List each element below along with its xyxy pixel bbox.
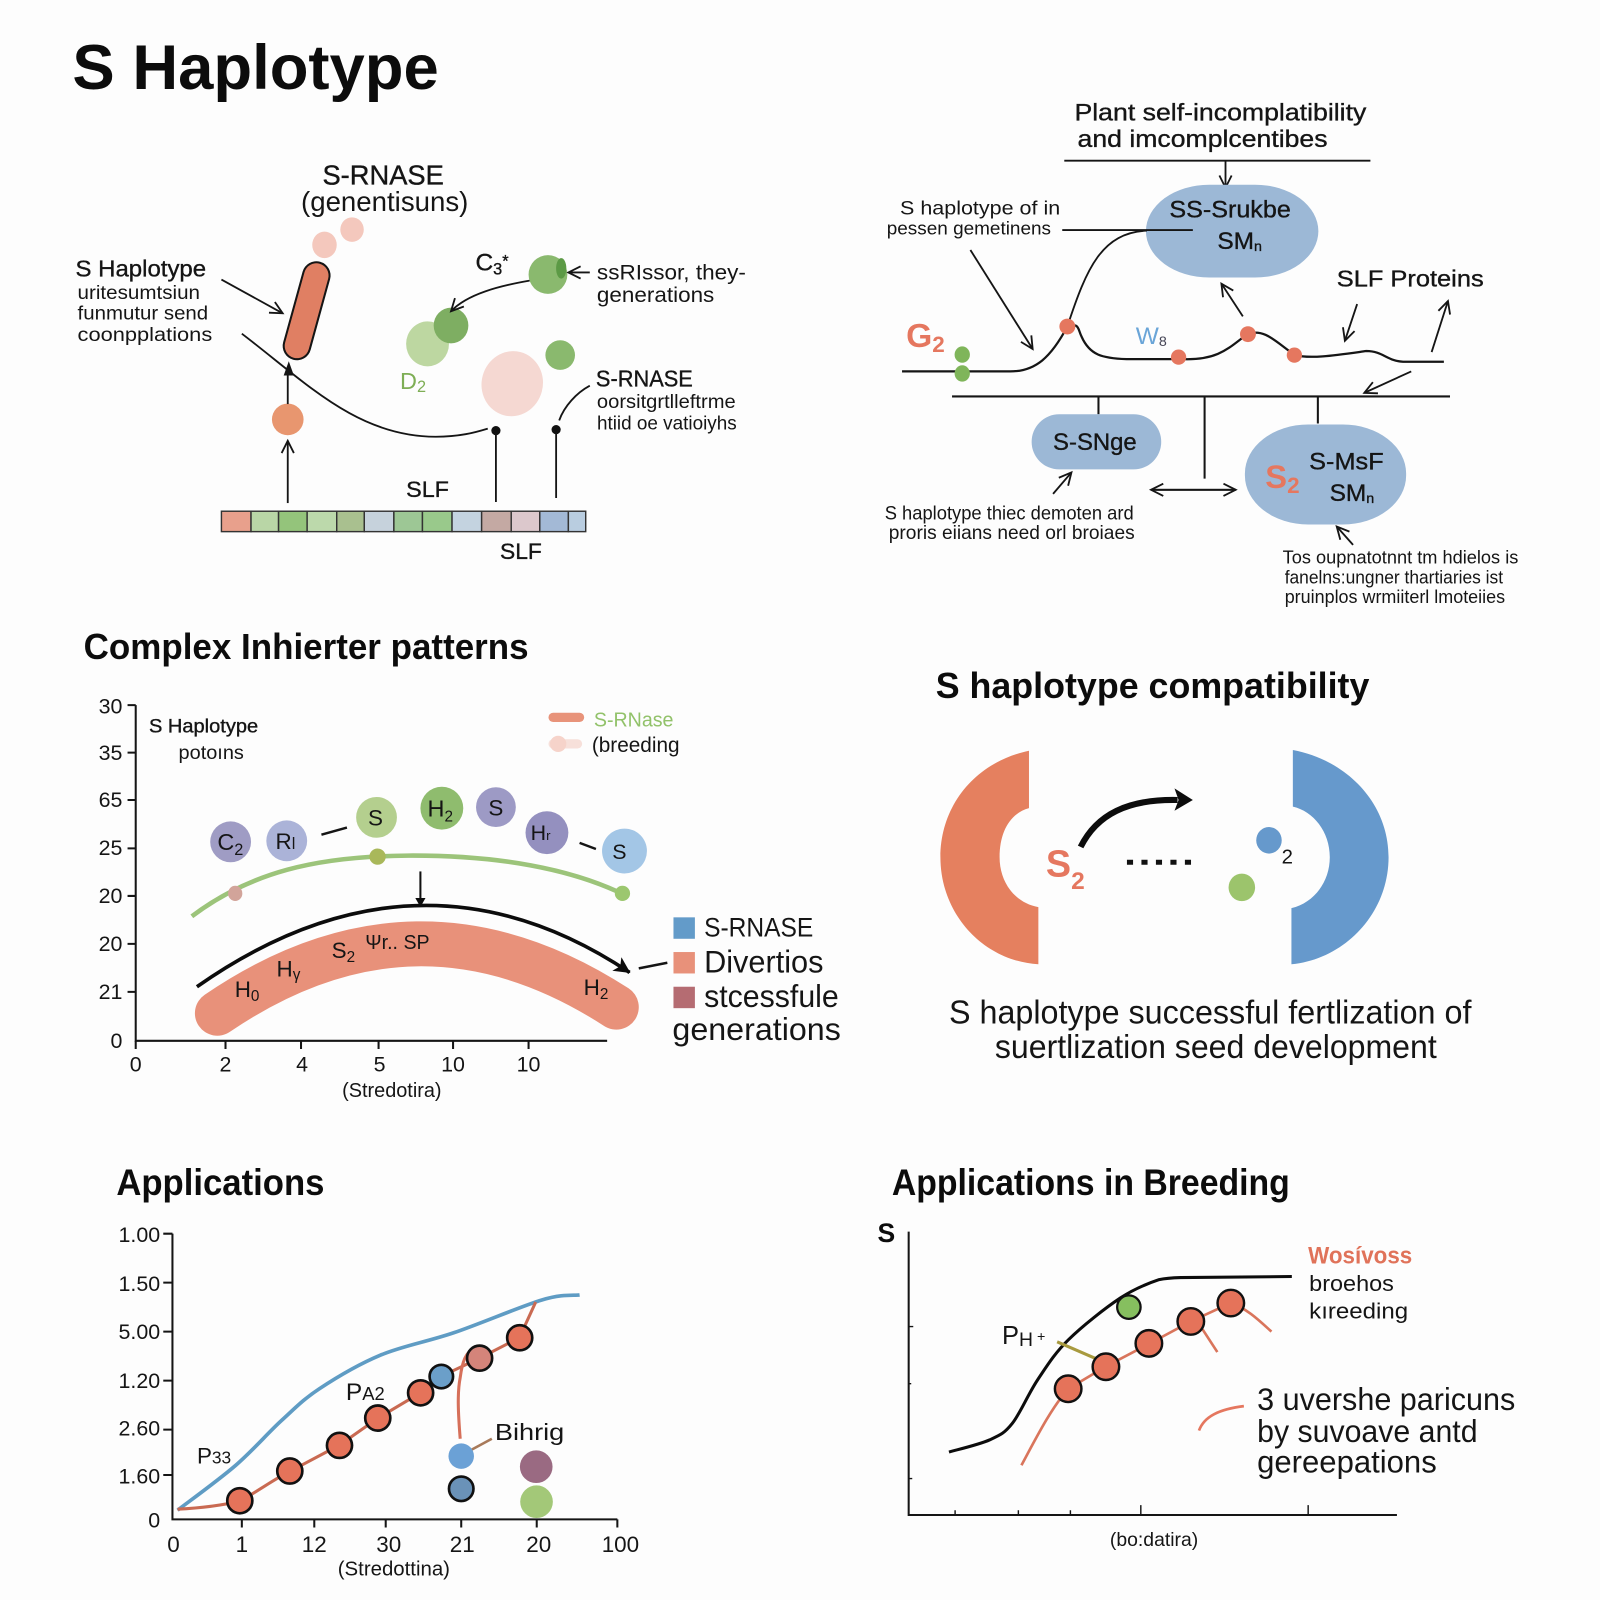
node: S-MsF blob: S — [1265, 458, 1287, 495]
arrow: black arc — [197, 905, 630, 987]
arrow: to green cell — [568, 271, 590, 273]
x axis labels: 4 — [296, 1052, 308, 1076]
y axis labels: 0 — [148, 1509, 160, 1533]
legend text: Wosívoss — [1308, 1242, 1412, 1269]
heading: S-RNASE: S-RNASE — [322, 160, 444, 191]
branch bus — [952, 396, 1450, 479]
y axis labels: 20 — [99, 884, 123, 908]
legend right: Divertios — [704, 943, 823, 979]
y axis labels: 65 — [99, 788, 122, 812]
chart label: potoıns — [179, 742, 244, 764]
x axis labels: 2 — [220, 1052, 231, 1076]
chart axes — [163, 1234, 617, 1528]
icon: orange capsule — [297, 276, 316, 346]
label: S2: 2 — [1071, 868, 1085, 895]
connector lines — [970, 230, 1193, 349]
x axis labels: 12 — [302, 1532, 327, 1557]
label: SLF upper: SLF — [406, 477, 449, 502]
text: S Haplotype callout — [76, 256, 212, 346]
band labels: H — [277, 957, 293, 982]
label: PA2: PA2 — [346, 1379, 385, 1406]
text: S haplotype of in — [887, 197, 1060, 239]
x axis title: (Stredotira) — [342, 1080, 442, 1102]
legend right — [672, 913, 841, 1047]
arrow: to blob — [1337, 527, 1353, 545]
haplotype bubbles: 2 — [444, 808, 453, 825]
series: orange line with markers — [178, 1302, 536, 1513]
haplotype bubbles: S — [612, 840, 627, 864]
blue dot with label — [1256, 827, 1293, 868]
legend right: generations — [672, 1011, 841, 1047]
arrows around wave — [1221, 284, 1448, 393]
icon: orange circle — [272, 404, 304, 435]
label: D2: 2 — [417, 378, 426, 396]
node: S-MsF blob: SM — [1330, 480, 1366, 507]
text: ssRIssor callout: ssRIssor, they- — [597, 261, 746, 285]
haplotype bubbles: H — [428, 795, 444, 821]
node: S-MsF blob: n — [1366, 491, 1374, 507]
x axis labels: 21 — [450, 1532, 475, 1557]
x axis labels: 0 — [130, 1052, 142, 1076]
node: S-SNge pill — [1032, 414, 1161, 469]
node: top blue blob: SM — [1217, 228, 1254, 255]
label: SLF lower: SLF — [500, 539, 542, 564]
series: red with markers — [1021, 1290, 1271, 1465]
node: top blue blob — [1146, 185, 1318, 278]
text: Tos oupnatotnn: pruinplos wrmiiterl lmoteiies — [1285, 586, 1505, 607]
panel: applications chart — [116, 1162, 639, 1581]
text: Tos oupnatotnn: Tos oupnatotnnt tm hdielos is — [1283, 546, 1518, 567]
blue dot with label: 2 — [1282, 846, 1293, 868]
x axis labels: 5 — [374, 1052, 386, 1076]
text: Tos oupnatotnn — [1283, 546, 1518, 607]
panel: S-RNASE gametophytic diagram — [76, 160, 746, 564]
panel: S haplotype compatibility — [936, 666, 1472, 1066]
legend text: broehos — [1309, 1271, 1394, 1296]
chart: wave line — [902, 325, 1444, 371]
node: S-MsF blob: S-MsF — [1309, 448, 1384, 475]
label: C3: * — [502, 252, 509, 270]
chart axes — [908, 1232, 1397, 1515]
caption — [949, 994, 1472, 1066]
haplotype bubbles: Rl — [276, 829, 295, 854]
x axis labels: 10 — [441, 1052, 465, 1076]
text: S-RNASE callout — [596, 366, 737, 435]
legend top: (breeding — [592, 733, 680, 757]
pointer curve — [1199, 1406, 1244, 1431]
y axis labels — [119, 1223, 160, 1533]
arrow: thick curved — [1081, 788, 1193, 847]
text: S haplotype thiec: S haplotype thiec demoten ard — [885, 502, 1134, 524]
legend right: S-RNASE — [704, 913, 813, 943]
node: top blue blob: n — [1254, 239, 1262, 255]
text: ssRIssor callout: generations — [597, 283, 714, 307]
label: S2: S — [1046, 843, 1071, 885]
y axis labels: 25 — [99, 836, 122, 860]
text: S-RNASE callout: htiid oe vatioiyhs — [597, 413, 737, 435]
arrow: double headed — [1151, 489, 1236, 491]
haplotype bubbles: S — [368, 806, 383, 831]
axis label: S: S — [878, 1218, 895, 1248]
arrows and connector curve — [221, 280, 590, 503]
y axis labels: 0 — [111, 1029, 123, 1053]
legend top: S-RNase — [594, 710, 673, 732]
heading rule and arrow — [1064, 161, 1370, 188]
x axis labels: 0 — [167, 1532, 180, 1557]
icon: pink vesicles — [312, 217, 364, 258]
caption: suertlization seed development — [995, 1029, 1437, 1066]
blue curve — [178, 1295, 580, 1510]
text: S haplotype of in: pessen gemetinens — [887, 218, 1051, 239]
heading: Applications — [116, 1162, 324, 1203]
text: ssRIssor callout — [597, 261, 746, 307]
panel: complex inheritance patterns — [84, 627, 841, 1102]
label: C3: C — [476, 249, 493, 276]
haplotype bubbles: Hr — [531, 821, 551, 845]
heading: plant self-incomplatibility — [1074, 99, 1367, 153]
text: S Haplotype callout: uritesumtsiun — [78, 282, 200, 304]
shape: orange crescent — [940, 751, 1038, 964]
icon: pale pink cell — [474, 344, 550, 423]
band labels — [235, 932, 608, 1005]
text: S Haplotype callout: S Haplotype — [76, 256, 206, 282]
haplotype bubbles: S — [488, 795, 503, 820]
heading: plant self-incomplatibility: and imcomplcentibes — [1078, 126, 1328, 153]
heading: plant self-incomplatibility: Plant self-incomplatibility — [1074, 99, 1367, 126]
text: S haplotype of in: S haplotype of in — [900, 197, 1060, 219]
band labels: H — [235, 977, 251, 1002]
x axis labels: 1 — [236, 1532, 248, 1557]
band labels: γ — [293, 967, 301, 984]
green curve — [192, 848, 630, 916]
text: S Haplotype callout: coonpplations — [78, 324, 212, 346]
panel: plant self-incompatibility diagram — [885, 99, 1518, 607]
heading: S haplotype compatibility — [936, 666, 1370, 706]
haplotype bubbles: 2 — [234, 841, 243, 859]
x axis title: (bo:datira) — [1110, 1529, 1198, 1551]
y axis labels: 1.60 — [119, 1465, 160, 1489]
subheading: genentisuns: (genentisuns) — [301, 186, 468, 217]
label: G2: G — [906, 318, 932, 355]
chart axes — [128, 705, 607, 1049]
text: Tos oupnatotnn: fanelns:ungner thartiaries ist — [1285, 567, 1503, 588]
band labels: 0 — [251, 988, 259, 1005]
text: S Haplotype callout: funmutur send — [78, 302, 208, 324]
green dot — [1229, 874, 1255, 901]
label: P33: P33 — [197, 1443, 231, 1468]
x axis labels — [130, 1052, 541, 1076]
band labels: Ψr.. SP — [365, 932, 430, 954]
label: D2: D — [400, 368, 417, 394]
x axis labels: 100 — [602, 1532, 639, 1557]
chart label — [149, 716, 258, 764]
label: G2: 2 — [932, 332, 945, 357]
band labels: 2 — [600, 986, 608, 1003]
y axis labels: 2.60 — [119, 1417, 160, 1441]
icon: green cells — [406, 255, 575, 370]
legend text: kıreeding — [1309, 1298, 1408, 1323]
dash to legend — [639, 963, 667, 968]
note text: by suvoave antd — [1257, 1413, 1478, 1449]
note text — [1257, 1381, 1515, 1479]
y axis labels: 1.50 — [119, 1272, 160, 1296]
node: S-MsF blob: 2 — [1287, 473, 1300, 498]
label: C3: 3 — [493, 260, 502, 278]
y axis labels: 20 — [99, 932, 123, 956]
arrow: down to arc — [419, 871, 421, 906]
label: SLF Proteins: SLF Proteins — [1337, 266, 1484, 292]
separate dots — [448, 1439, 553, 1518]
haplotype bubbles: C — [217, 829, 234, 855]
y axis labels — [99, 694, 123, 1053]
dotted link — [1127, 860, 1199, 865]
chart label: S Haplotype — [149, 716, 258, 738]
node: S-MsF blob — [1245, 424, 1406, 524]
text: S-RNASE callout: oorsitgrtlleftrme — [597, 391, 736, 413]
connector: olive — [1057, 1342, 1095, 1358]
heading: Complex Inhierter patterns — [84, 627, 529, 667]
node: S-SNge pill: S-SNge — [1053, 429, 1137, 456]
legend right: stcessfule — [704, 978, 839, 1014]
band labels: 2 — [347, 949, 355, 966]
x axis title: (Stredottina) — [338, 1559, 450, 1581]
label: Bihrig: Bihrig — [495, 1419, 564, 1445]
y axis labels: 1.00 — [119, 1223, 160, 1247]
dashes — [321, 828, 596, 849]
haplotype bubbles — [210, 787, 647, 873]
text: S haplotype thiec — [885, 502, 1135, 544]
arrow: green curve — [451, 281, 530, 311]
y axis labels: 1.20 — [119, 1369, 160, 1393]
shape: blue crescent — [1291, 750, 1389, 964]
legend top — [550, 710, 680, 757]
label: W8: 8 — [1159, 334, 1167, 350]
label: W8: W — [1136, 323, 1159, 350]
x axis labels: 10 — [517, 1052, 541, 1076]
title: S Haplotype — [72, 33, 439, 103]
note text: gereepations — [1257, 1443, 1437, 1479]
label: PH: H — [1019, 1329, 1033, 1351]
x axis labels: 30 — [376, 1532, 401, 1557]
x axis labels — [167, 1532, 639, 1557]
y axis labels: 30 — [99, 694, 123, 718]
x axis labels: 20 — [526, 1532, 551, 1557]
node: top blue blob: SS-Srukbe — [1169, 196, 1291, 223]
text: S haplotype thiec: proris eiians need orl broiaes — [889, 522, 1135, 544]
arrow: to pill — [1053, 472, 1071, 494]
y axis labels: 21 — [99, 980, 122, 1004]
label: PH: P — [1002, 1322, 1019, 1350]
panel: applications in breeding — [878, 1162, 1515, 1551]
y axis labels: 5.00 — [119, 1320, 160, 1344]
label: PH: + — [1033, 1329, 1045, 1345]
caption: S haplotype successful fertlization of — [949, 994, 1472, 1031]
legend text — [1308, 1242, 1412, 1323]
band: orange arc — [217, 944, 616, 1013]
band labels: S — [332, 938, 347, 963]
y axis labels: 35 — [99, 741, 122, 765]
chart: gene segment bar — [221, 511, 586, 532]
text: S-RNASE callout: S-RNASE — [596, 366, 693, 392]
note text: 3 uvershe paricuns — [1257, 1381, 1515, 1417]
heading: Applications in Breeding — [892, 1162, 1290, 1203]
band labels: H — [584, 975, 600, 1000]
black curve — [949, 1277, 1292, 1452]
wave markers — [955, 319, 1302, 382]
